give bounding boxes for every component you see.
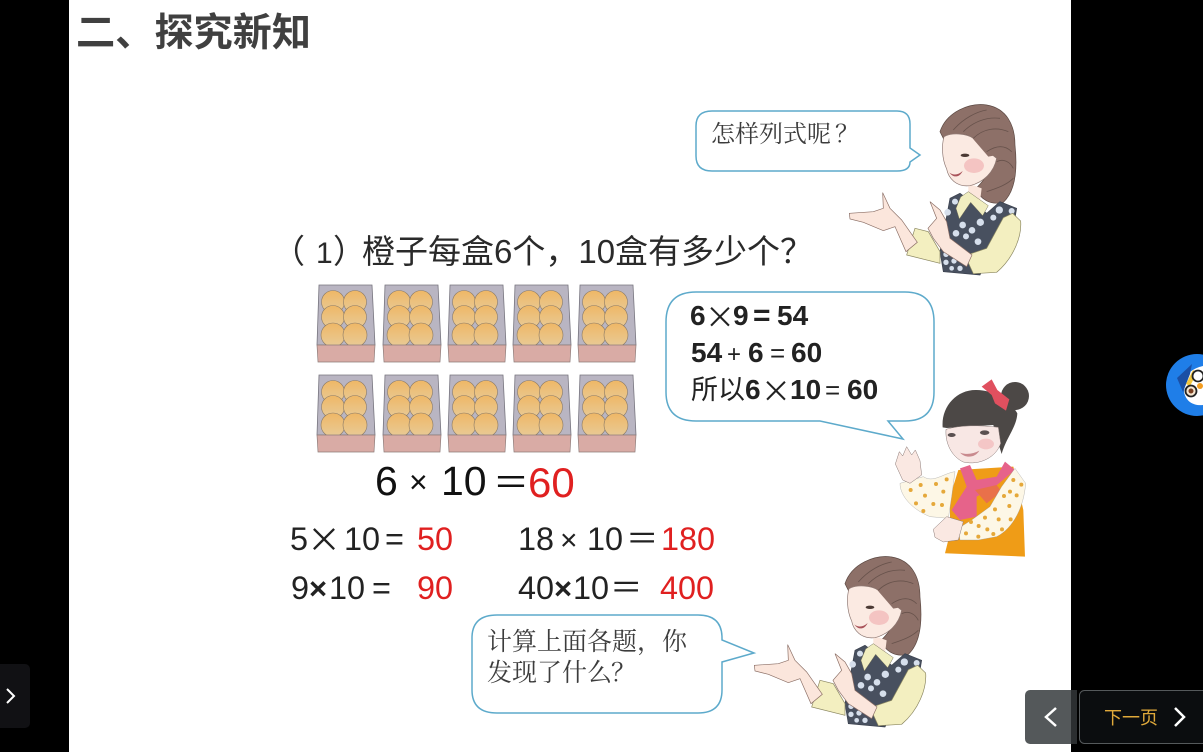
practice equations: ×: [560, 524, 578, 557]
speech bubble: how to write the equation: ？: [835, 122, 859, 148]
speech bubble: calculation reasoning: 9: [733, 300, 749, 331]
main equation: 60: [528, 459, 575, 506]
practice equations: ＝: [626, 521, 658, 557]
main equation: ＝: [493, 462, 529, 503]
practice equations: 10: [573, 570, 609, 606]
speech bubble: calculation reasoning: [666, 292, 934, 439]
title: 二、探究新知: [76, 12, 311, 55]
speech bubble: what did you discover: 发现了什么: [487, 659, 612, 687]
speech bubble: calculation reasoning: ×: [761, 367, 791, 411]
speech bubble: calculation reasoning: 6: [748, 337, 764, 368]
next page button: [1080, 690, 1203, 744]
speech bubble: calculation reasoning: 10: [790, 374, 821, 405]
previous page button: [1025, 690, 1077, 744]
practice equations: ×: [309, 571, 327, 606]
speech bubble: what did you discover: [472, 615, 754, 713]
main equation: [375, 458, 575, 506]
speech bubble: what did you discover: ？: [611, 660, 636, 687]
practice equations: 10: [587, 521, 623, 557]
question text: 橙子每盒6个，10盒有多少个？: [362, 233, 813, 270]
speech bubble: calculation reasoning: 6: [690, 300, 706, 331]
practice equations: 5: [290, 521, 308, 557]
practice equations: 90: [417, 570, 453, 606]
speech bubble: calculation reasoning: +: [727, 341, 741, 368]
main equation: 6: [375, 458, 398, 504]
speech bubble: calculation reasoning: 所以: [691, 375, 745, 405]
illustration: girl with hair bun: [895, 379, 1029, 557]
practice equations: 10: [344, 521, 380, 557]
speech bubble: calculation reasoning: 54: [691, 337, 723, 368]
practice equations: ×: [554, 571, 572, 606]
practice equations: 9: [291, 570, 309, 606]
speech bubble: what did you discover: 计算上面各题，你: [487, 628, 688, 656]
speech bubble: calculation reasoning: 54: [777, 300, 809, 331]
speech bubble: calculation reasoning: =: [770, 338, 785, 368]
illustration: teacher bottom: [754, 557, 926, 727]
floating owl assistant icon: [1166, 354, 1203, 416]
orange boxes grid: [317, 285, 636, 452]
speech bubble: how to write the equation: 怎样列式呢: [711, 121, 831, 148]
speech bubble: calculation reasoning: ×: [705, 293, 735, 337]
practice equations: 10: [329, 570, 365, 606]
next page button: 下一页: [1104, 708, 1158, 728]
speech bubble: calculation reasoning: =: [753, 299, 771, 332]
main equation: 10: [441, 458, 487, 504]
question text: （: [272, 233, 305, 270]
main equation: ×: [409, 464, 428, 500]
practice equations: 180: [661, 521, 715, 557]
speech bubble: calculation reasoning: 6: [745, 374, 761, 405]
practice equations: =: [372, 570, 391, 606]
speech bubble: calculation reasoning: 60: [847, 374, 878, 405]
illustration: teacher top: [849, 105, 1021, 275]
speech bubble: calculation reasoning: 60: [791, 337, 822, 368]
practice equations: 40: [518, 570, 554, 606]
practice equations: 400: [660, 570, 714, 606]
question text: ）: [333, 233, 366, 270]
speech bubble: how to write the equation: [696, 111, 920, 171]
practice equations: 50: [417, 521, 453, 557]
practice equations: 18: [518, 521, 554, 557]
sidebar expand button: [0, 664, 30, 728]
practice equations: [290, 513, 715, 606]
practice equations: =: [385, 521, 404, 557]
practice equations: ＝: [610, 570, 642, 606]
speech bubble: calculation reasoning: =: [825, 375, 840, 405]
question text: 1: [316, 237, 333, 270]
practice equations: ×: [307, 513, 341, 562]
